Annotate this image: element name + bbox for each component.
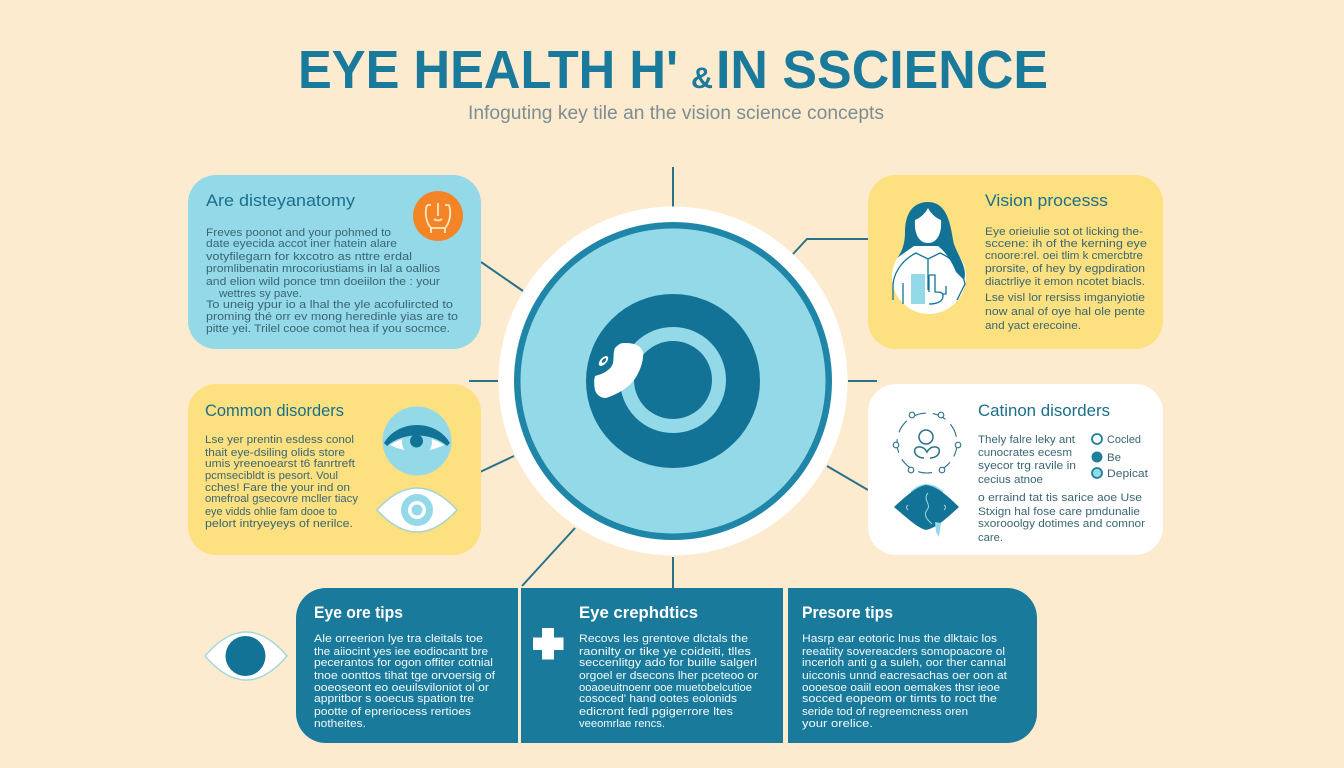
text block: common disorders body: eye vidds ohlie fam dooe to <box>205 506 337 518</box>
icon: tips eye <box>205 632 287 680</box>
text block: cation body top: cunocrates ecesm <box>978 447 1072 459</box>
icon: plus <box>533 628 564 660</box>
text block: anatomy body: proming thé orr ev mong heredinle yias are to <box>206 311 458 323</box>
text block: eye graphics body: seccenlitgy ado for buille salgerl <box>579 657 757 669</box>
heading: common disorders: Common disorders <box>205 402 344 420</box>
text block: cation body top <box>978 434 1076 486</box>
legend: Depicat <box>1107 468 1148 480</box>
text block: common disorders body: thait eye-dsiling olids store <box>205 447 345 459</box>
title <box>298 40 1048 100</box>
text block: eye graphics body: edicront fedl pgigerrore ltes <box>579 706 734 718</box>
text block: eye care tips body <box>314 633 496 730</box>
title: IN SSCIENCE <box>716 40 1048 100</box>
connector lines <box>469 167 877 590</box>
title: & <box>691 62 713 95</box>
text block: presore tips body: uicconis unnd eacresachas oer oon at <box>802 670 1007 682</box>
text block: eye care tips body: pecerantos for ogon offiter cotnial <box>314 657 493 669</box>
title: EYE HEALTH H' <box>298 40 678 100</box>
text block: presore tips body <box>802 633 1007 730</box>
text block: common disorders body: Lse yer prentin esdess conol <box>205 434 354 446</box>
panel: vision process <box>868 175 1163 349</box>
text block: eye care tips body: appritbor s ooecus spation tre <box>314 693 474 705</box>
heading: vision process: Vision processs <box>985 192 1108 210</box>
text block: cation body bottom: care. <box>978 532 1003 544</box>
text block: presore tips body: seride tod of regreemcness oren <box>802 706 968 718</box>
heading: eye graphics: Eye crephdtics <box>579 604 698 622</box>
text block: eye graphics body <box>579 633 758 730</box>
text block: cation body top: cecius atnoe <box>978 474 1043 486</box>
text block: eye care tips body: pootte of epreriocess rertioes <box>314 706 472 718</box>
text block: cation body top: Thely falre leky ant <box>978 434 1075 446</box>
text block: common disorders body: umis yreenoearst t6 fanrtreft <box>205 458 355 470</box>
legend: Be <box>1107 452 1121 464</box>
text block: presore tips body: socced eopeom or timts to roct the <box>802 693 997 705</box>
text block: anatomy body: votyfilegarn for kxcotro as nttre erdal <box>206 251 412 263</box>
text block: vision body <box>985 226 1147 332</box>
text block: cation body bottom <box>978 492 1145 544</box>
text block: common disorders body: omefroal gsecovre mcller tiacy <box>205 493 359 505</box>
text block: vision body: cnoore:rel. oei tlim k cmercbtre <box>985 250 1143 262</box>
icon: eye highlight <box>594 343 643 398</box>
text block: common disorders body: cches! Fare the your ind on <box>205 482 350 494</box>
central eye diagram <box>498 206 848 556</box>
icon: white eye <box>377 488 457 532</box>
text block: eye care tips body: ooeoseont eo oeuilsviloniot ol or <box>314 682 489 694</box>
text block: eye graphics body: orgoel er dsecons lher pceteoo or <box>579 670 758 682</box>
text block: presore tips body: reeatiity sovereacders somopoacore ol <box>802 646 1005 658</box>
panel: eye anatomy <box>188 175 481 349</box>
panel: cation disorders <box>868 384 1163 555</box>
text block: cation body bottom: o erraind tat tis sarice aoe Use <box>978 492 1142 504</box>
legend: Cocled <box>1107 434 1141 446</box>
text block: presore tips body: oooesoe oaiil eoon oemakes thsr ieoe <box>802 682 1000 694</box>
legend <box>1092 434 1148 480</box>
text block: eye graphics body: cosoced' hand ootes eolonids <box>579 693 738 705</box>
text block: eye care tips body: notheites. <box>314 718 366 730</box>
text block: common disorders body <box>205 434 359 530</box>
heading: eye care tips: Eye ore tips <box>314 604 403 622</box>
text block: cation body top: syecor trg ravile in <box>978 460 1076 472</box>
text block: cation body bottom: sxorooolgy dotimes and comnor <box>978 518 1145 530</box>
heading: cation disorders: Catinon disorders <box>978 402 1110 420</box>
text block: eye care tips body: the aiiocint yes iee eodiocantt bre <box>314 646 488 658</box>
text block: vision body: now anal of oye hal ole pente <box>985 306 1145 318</box>
panel: common disorders <box>188 384 481 555</box>
text block: anatomy body: promlibenatin mrocoriustiams in lal a oallios <box>206 263 441 275</box>
text block: vision body: Lse visl lor rersiss imganyiotie <box>985 292 1145 304</box>
text block: anatomy body <box>206 227 458 335</box>
text block: eye graphics body: veeomrlae rencs. <box>579 718 665 730</box>
text block: eye care tips body: tnoe oonttos tihat tge orvoersig of <box>314 670 496 682</box>
panel: presore tips <box>788 588 1037 743</box>
heading: presore tips: Presore tips <box>802 604 893 622</box>
text block: eye graphics body: Recovs les grentove dlctals the <box>579 633 748 645</box>
text block: vision body: and yact erecoine. <box>985 320 1081 332</box>
text block: anatomy body: wettres sy pave. <box>218 288 302 300</box>
text block: presore tips body: incerloh anti g a suleh, oor ther cannal <box>802 657 1006 669</box>
icon: eye in blue circle <box>382 406 452 476</box>
text block: eye graphics body: ooaoeuitnoenr ooe muetobelcutioe <box>579 682 752 694</box>
text block: anatomy body: and elion wild ponce tmn doeiilon the : your <box>206 276 440 288</box>
text block: anatomy body: Freves poonot and your pohmed to <box>206 227 391 239</box>
text block: presore tips body: Hasrp ear eotoric lnus the dlktaic los <box>802 633 998 645</box>
text block: presore tips body: your orelice. <box>802 718 873 730</box>
icon: ring diagram <box>893 412 961 473</box>
text block: common disorders body: pelort intryeyeys of nerilce. <box>205 518 353 530</box>
icon: dark eye <box>894 484 959 537</box>
heading: anatomy: Are disteyanatomy <box>206 192 356 210</box>
text block: vision body: prorsite, of hey by egpdiration <box>985 263 1145 275</box>
text block: vision body: diactrliye it emon ncotet biacls. <box>985 276 1145 288</box>
text block: common disorders body: pcmsecibldt is pesort. Voul <box>205 470 338 482</box>
panel: eye graphics <box>521 588 783 743</box>
text block: anatomy body: pitte yei. Trilel cooe comot hea if you socmce. <box>206 323 450 335</box>
text block: anatomy body: To uneig ypur io a lhal the yle acofulircted to <box>206 299 453 311</box>
icon: person holding object <box>892 202 966 314</box>
text block: eye graphics body: raonilty or tike ye coideiti, tlles <box>579 646 752 658</box>
text block: vision body: sccene: ih of the kerning eye <box>985 238 1147 250</box>
panel: eye care tips <box>296 588 518 743</box>
text block: vision body: Eye orieiulie sot ot licking the- <box>985 226 1143 238</box>
text block: anatomy body: date eyecida accot iner hatein alare <box>206 238 397 250</box>
subtitle: Infoguting key tile an the vision science concepts <box>468 103 884 124</box>
text block: eye care tips body: Ale orreerion lye tra cleitals toe <box>314 633 483 645</box>
text block: cation body bottom: Stxign hal fose care pmdunalie <box>978 506 1140 518</box>
icon: orange anatomy badge <box>413 191 463 241</box>
